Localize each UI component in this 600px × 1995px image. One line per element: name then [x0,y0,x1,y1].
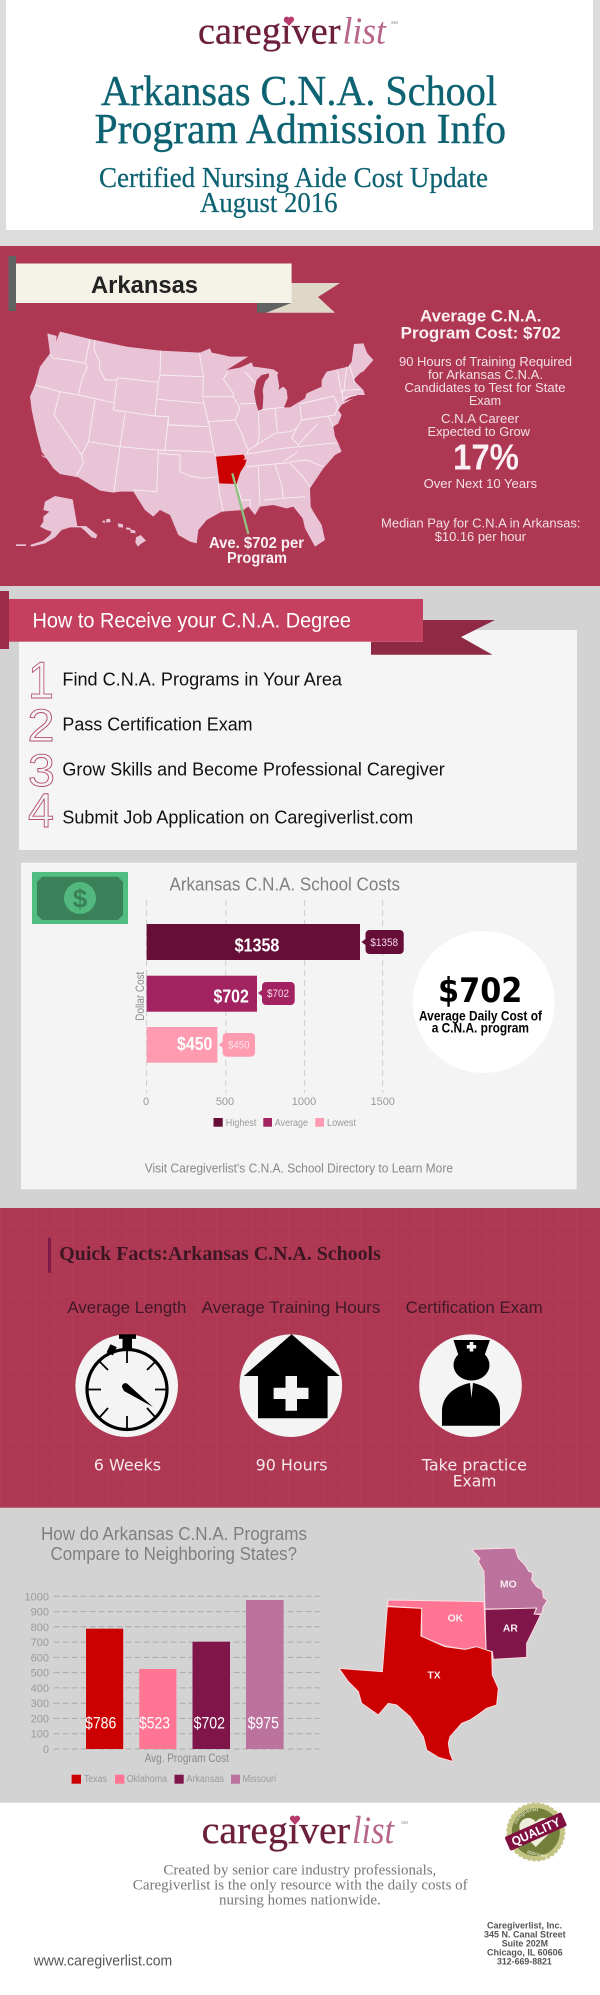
panel: footer [0,1802,600,1995]
step 3 [28,745,445,796]
map: Alaska and Hawaii [16,455,146,547]
map: neighboring states: MO [500,1580,517,1591]
logo: caregiverlist footer: caregiver [202,1809,350,1852]
chart legend: Highest [226,1118,257,1129]
text: average program cost [401,308,561,343]
step 4: 4 [28,785,54,838]
logo: caregiverlist footer: list [352,1809,395,1852]
chart legend: Average [275,1118,308,1129]
subtitle: Certified Nursing Aide Cost Update [99,163,488,194]
icon: nurse [442,1340,500,1426]
step 2: Pass Certification Exam [62,715,253,735]
text: tagline: Created by senior care industry professionals, [163,1862,436,1878]
text: training hours: Exam [469,393,501,408]
step 3: 3 [28,745,55,796]
panel: Arkansas overview [0,246,600,586]
fact: average length [67,1299,186,1475]
text: tagline: Caregiverlist is the only resource with the daily costs of [133,1877,468,1893]
title [94,69,506,153]
panel: quick facts [0,1208,600,1508]
bar chart: program cost by state: $702 [194,1713,225,1732]
map: United States with Arkansas highlighted [16,332,373,547]
step 1: 1 [28,652,54,710]
ribbon: Arkansas heading: Arkansas [91,272,198,299]
text: median pay: Median Pay for C.N.A in Arkansas: [381,516,580,531]
text: average program cost: Average C.N.A. [420,308,542,326]
step 2 [28,700,253,751]
highlight: Arkansas [216,455,247,484]
subtitle [99,163,488,219]
text: directory link: Visit Caregiverlist's C.N.A. School Directory to Learn More [145,1161,453,1176]
text: address: 345 N. Canal Street [484,1930,566,1941]
logo: caregiverlist: list [342,10,387,52]
bar chart: costs: $1358 [370,937,398,949]
stat: career growth: Over Next 10 Years [424,476,537,491]
stat: career growth [424,411,537,491]
step 1: Find C.N.A. Programs in Your Area [62,670,343,690]
stat: career growth: C.N.A Career [441,411,520,426]
lake: Lake Michigan [254,373,269,411]
chart legend: Missouri [243,1774,276,1785]
chart legend: Oklahoma [127,1774,167,1785]
fact: certification exam: Certification Exam [406,1299,543,1317]
text: median pay: $10.16 per hour [435,529,527,544]
leader line [232,473,248,534]
title: Arkansas C.N.A. School [101,69,497,115]
fact: average length: Average Length [67,1299,186,1317]
bar chart: program cost by state: 100 [31,1729,49,1741]
bar chart: program cost by state: 700 [31,1637,49,1649]
panel: neighboring states comparison [25,1523,547,1785]
step 1 [28,652,343,710]
text: training hours: for Arkansas C.N.A. [428,367,543,382]
ribbon: section heading [0,591,495,655]
bar chart: program cost by state: 300 [31,1698,49,1710]
panel: header [6,0,593,230]
stat: career growth: 17% [453,436,519,477]
map: neighboring states [339,1548,547,1762]
heading: Compare to Neighboring States? [50,1543,297,1564]
text: address: Suite 202M [502,1939,548,1950]
text: address: Caregiverlist, Inc. [487,1921,562,1932]
subtitle: August 2016 [200,188,338,219]
text: training hours: Candidates to Test for State [404,380,566,395]
step 4 [28,785,413,838]
bar chart: program cost by state: $786 [85,1713,116,1732]
text: training hours: 90 Hours of Training Required [399,354,572,369]
stat: career growth: Expected to Grow [428,424,531,439]
icon: quality seal: caregiverlist [514,1808,538,1824]
bar chart: costs: 1000 [292,1096,316,1108]
icon: quality seal [505,1802,567,1862]
bar chart: costs: 0 [143,1096,149,1108]
fact: certification exam [406,1299,543,1491]
text: tagline: nursing homes nationwide. [219,1893,381,1909]
heading [41,1523,307,1564]
logo: caregiverlist: SM [391,20,398,25]
chart legend: Arkansas [186,1774,224,1785]
bar chart: program cost by state: 900 [31,1607,49,1619]
map: neighboring states: TX [427,1670,441,1681]
fact: average length: 6 Weeks [94,1456,161,1475]
bar chart: program cost by state: 0 [43,1744,49,1756]
text: address: Chicago, IL 60606 [487,1947,563,1958]
bar chart: program cost by state: 1000 [25,1591,49,1603]
bar chart: costs: $702 [267,988,289,1000]
fact: training hours: Average Training Hours [202,1299,380,1317]
chart title: Arkansas C.N.A. School Costs [170,874,400,895]
heading: Quick Facts:Arkansas C.N.A. Schools [59,1243,381,1265]
icon: house with cross [244,1334,340,1418]
step 3: Grow Skills and Become Professional Caregiver [62,760,445,780]
fact: training hours [202,1299,380,1475]
chart legend [72,1774,276,1785]
callout: average cost: a C.N.A. program [432,1021,529,1036]
bar chart: program cost by state: $523 [139,1713,170,1732]
bar chart: costs: $702 [214,987,249,1007]
bar chart: program cost by state: $975 [248,1713,279,1732]
text: median pay [381,516,580,544]
fact: certification exam: Exam [453,1472,496,1491]
bar chart: costs: Dollar Cost [133,971,147,1021]
text: address [484,1921,566,1967]
map callout [209,535,304,567]
heading [48,1238,381,1273]
step 2: 2 [28,700,54,751]
bar chart: program cost by state [25,1591,320,1765]
fact: certification exam: Take practice [421,1456,527,1475]
bar chart: costs: 1500 [370,1096,395,1108]
fact: training hours: 90 Hours [256,1456,328,1475]
icon: dollar bill [32,872,128,924]
heading: How do Arkansas C.N.A. Programs [41,1523,307,1544]
callout: average cost: Average Daily Cost of [419,1009,542,1024]
panel: school costs [21,863,577,1189]
bar chart: program cost by state: 400 [31,1683,49,1695]
bar chart: program cost by state: Avg. Program Cost [145,1751,229,1765]
text: tagline [133,1862,468,1909]
bar chart: program cost by state: 200 [31,1713,49,1725]
panel: how to receive degree [0,591,577,850]
icon: quality seal: approved [526,1849,548,1860]
bar chart: costs: $450 [177,1034,212,1054]
callout: average cost [413,931,555,1073]
callout: average cost: $702 [438,971,522,1011]
text: address: 312-669-8821 [497,1956,552,1967]
text: average program cost: Program Cost: $702 [401,325,561,343]
ribbon: section heading: How to Receive your C.N.A. Degree [32,610,351,633]
bar chart: costs [133,900,404,1108]
bar chart: costs: $450 [228,1040,250,1052]
title: Program Admission Info [94,107,506,153]
chart legend [214,1118,356,1129]
bar chart: costs: 500 [216,1096,234,1108]
icon: quality seal: QUALITY [509,1815,563,1849]
step 4: Submit Job Application on Caregiverlist.com [62,808,413,828]
chart legend: Texas [84,1774,107,1785]
logo: caregiverlist: caregiver [198,10,341,52]
map callout: Program [227,550,287,567]
logo: caregiverlist footer: SM [401,1820,408,1825]
chart legend: Lowest [327,1118,356,1129]
map callout: Ave. $702 per [209,535,304,552]
map: neighboring states: OK [448,1614,464,1625]
map: neighboring states: AR [503,1624,518,1635]
icon: stopwatch [87,1334,167,1430]
text: training hours [399,354,572,408]
text: website: www.caregiverlist.com [33,1953,172,1970]
bar chart: costs: $1358 [235,936,279,956]
ribbon: Arkansas heading [8,256,340,313]
bar chart: program cost by state: 800 [31,1622,49,1634]
bar chart: program cost by state: 500 [31,1668,49,1680]
icon: dollar bill: $ [73,884,88,914]
bar chart: program cost by state: 600 [31,1652,49,1664]
